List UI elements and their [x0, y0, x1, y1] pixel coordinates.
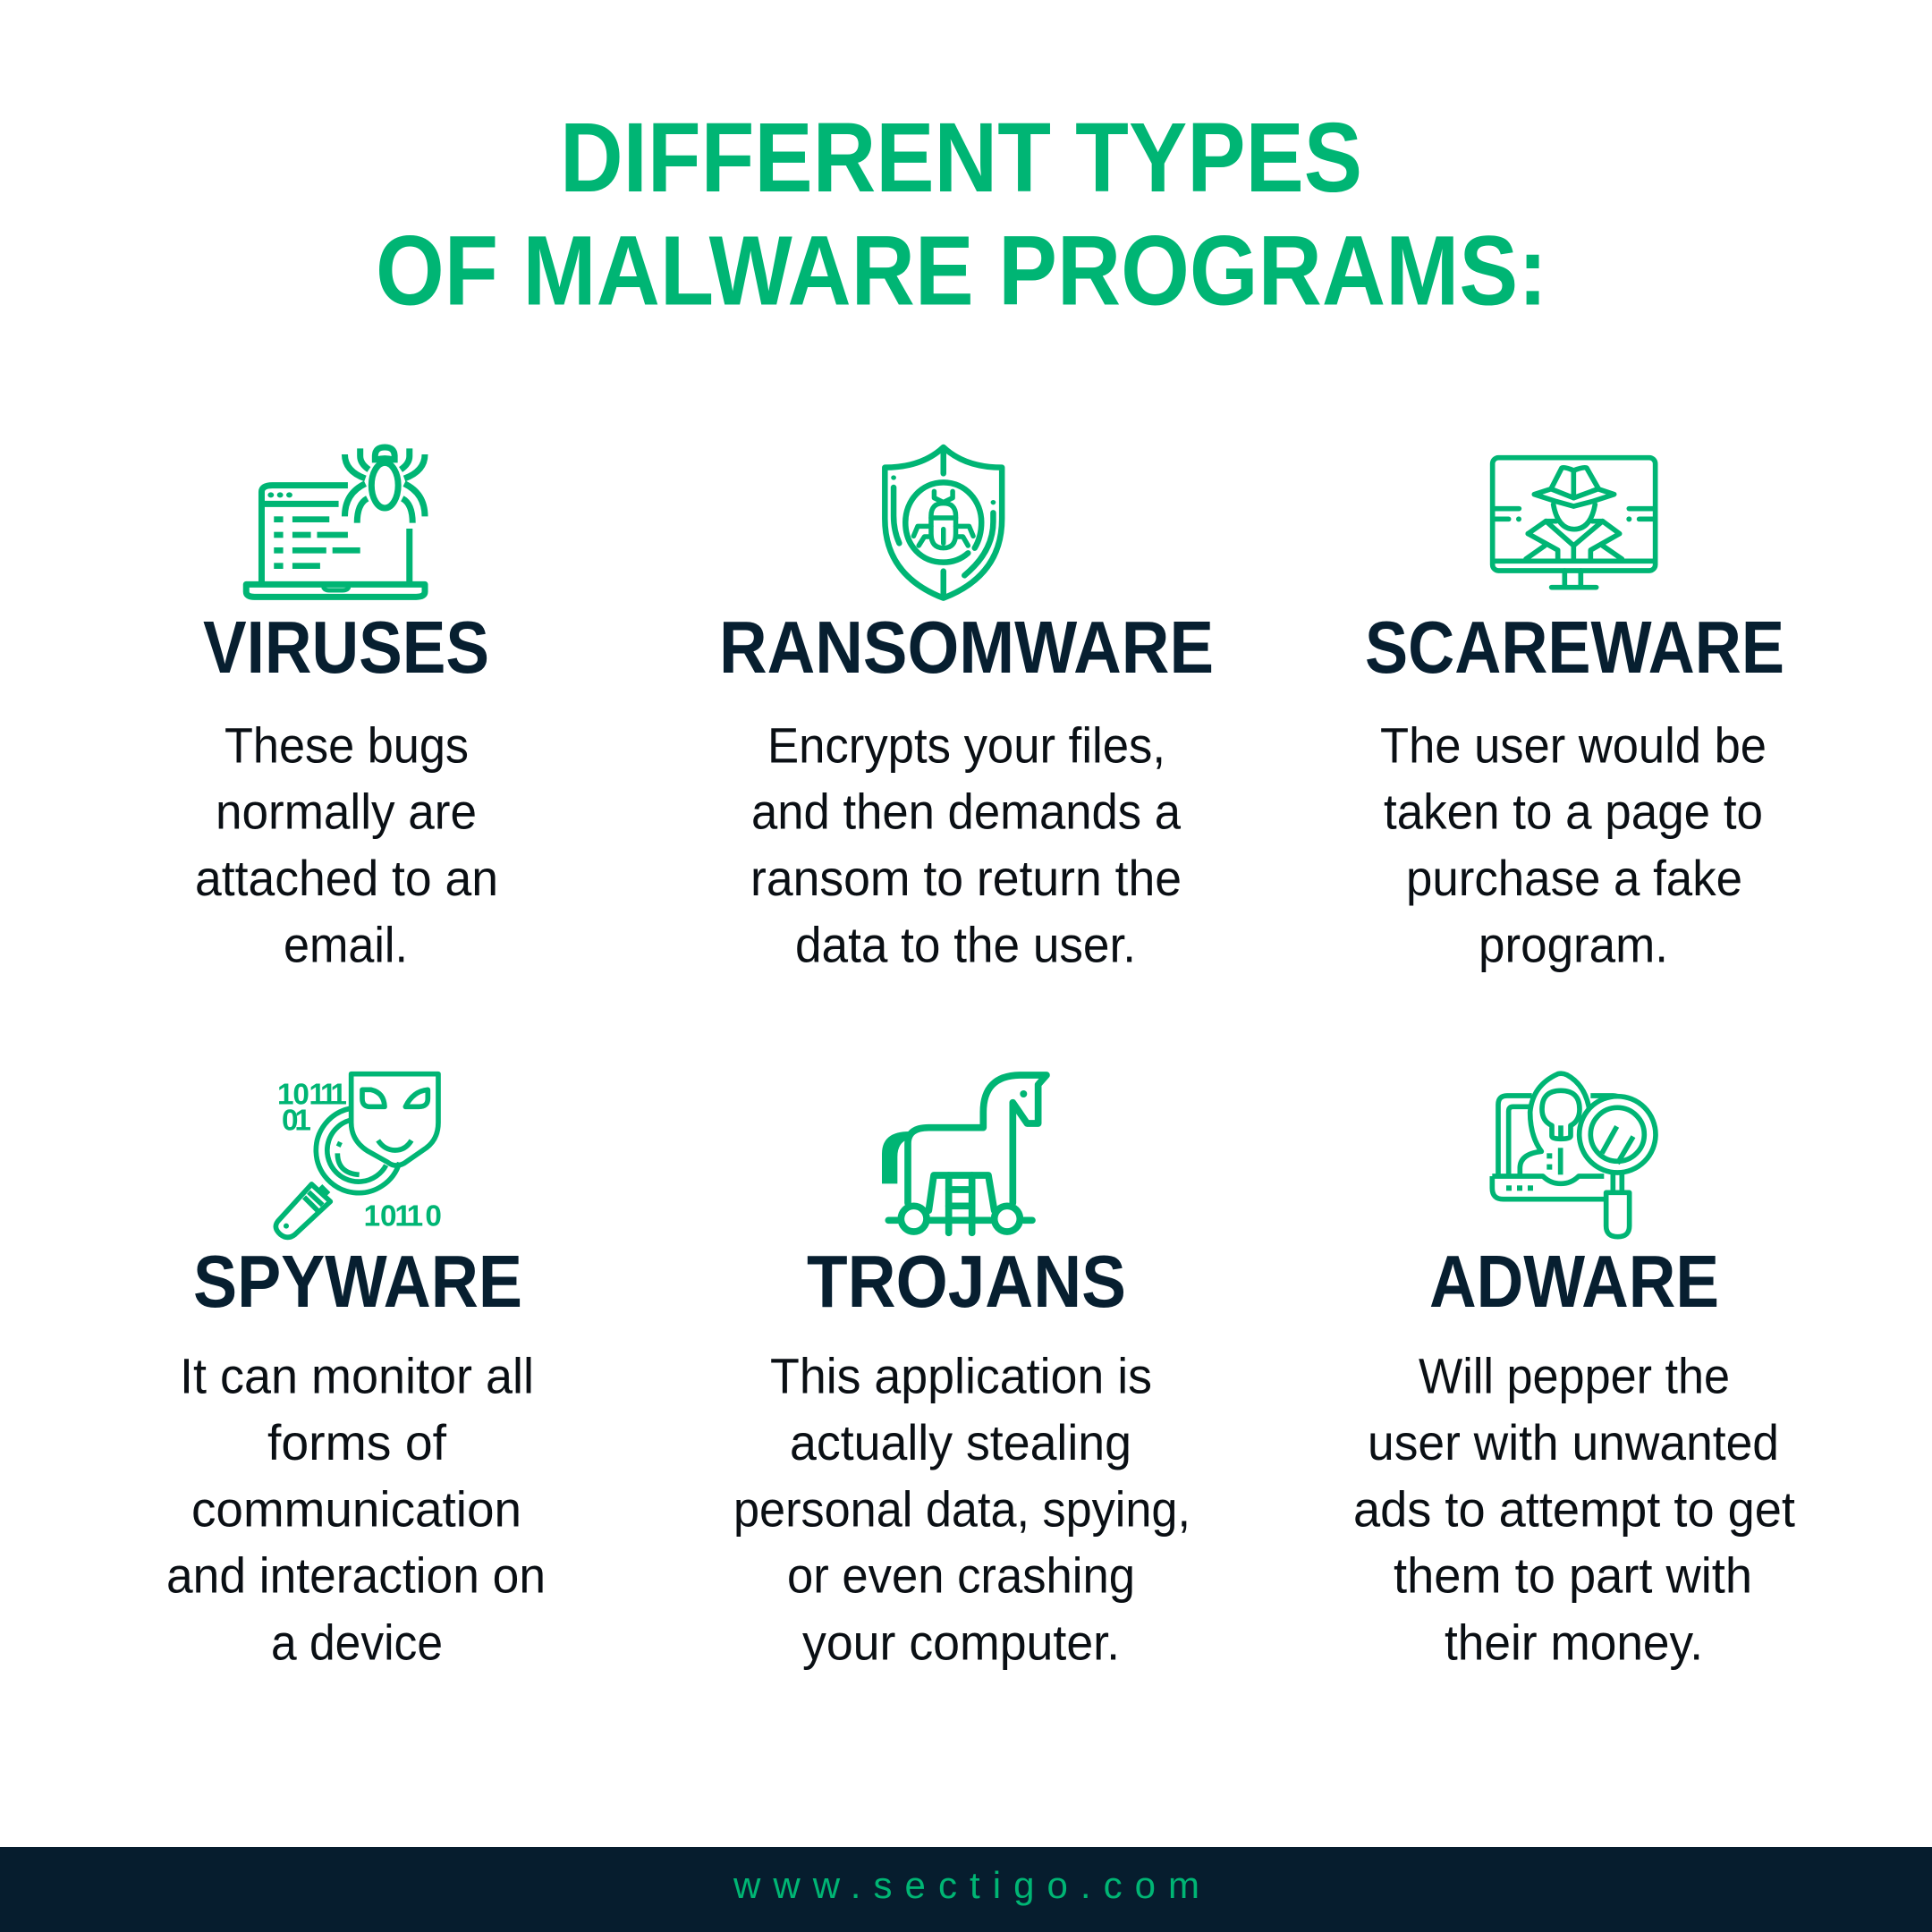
text: ransomware description: [750, 716, 1182, 972]
heading: viruses: VIRUSES: [203, 606, 489, 689]
text: spyware description: forms of: [267, 1414, 446, 1470]
heading: trojans: TROJANS: [807, 1240, 1126, 1323]
text: scareware description: The user would be: [1380, 716, 1767, 773]
icon: shield with bug: [885, 447, 1002, 598]
text: spyware description: a device: [271, 1614, 443, 1671]
heading: spyware: SPYWARE: [193, 1240, 522, 1323]
heading: adware: ADWARE: [1429, 1240, 1719, 1323]
text: adware description: ads to attempt to get: [1353, 1481, 1795, 1537]
icon: trojan horse: [882, 1075, 1046, 1233]
footer url: www.sectigo.com: [733, 1864, 1199, 1906]
title: OF MALWARE PROGRAMS:: [376, 216, 1547, 326]
text: spyware description: communication: [191, 1481, 521, 1537]
icon text: binary digits: 10111: [277, 1078, 347, 1111]
text: adware description: [1353, 1348, 1795, 1671]
panel: adware: [1353, 1073, 1795, 1671]
text: viruses description: attached to an: [195, 850, 498, 906]
text: viruses description: email.: [284, 916, 408, 972]
heading: ransomware: RANSOMWARE: [719, 606, 1214, 689]
text: spyware description: [166, 1348, 546, 1671]
text: trojans description: [733, 1348, 1191, 1671]
text: trojans description: personal data, spying,: [733, 1481, 1191, 1537]
text: adware description: them to part with: [1394, 1547, 1752, 1604]
text: ransomware description: and then demands a: [751, 784, 1182, 839]
text: spyware description: It can monitor all: [180, 1348, 534, 1404]
text: scareware description: [1380, 716, 1767, 972]
text: trojans description: your computer.: [802, 1614, 1120, 1671]
title: [376, 103, 1547, 326]
text: ransomware description: Encrypts your files,: [767, 716, 1165, 773]
text: trojans description: This application is: [770, 1348, 1152, 1404]
text: adware description: their money.: [1445, 1614, 1703, 1671]
icon: laptop with bulb and magnifier: [1492, 1073, 1656, 1237]
text: trojans description: actually stealing: [790, 1414, 1131, 1470]
icon text: binary digits: [277, 1078, 442, 1233]
text: viruses description: normally are: [216, 784, 477, 839]
panel: trojans: [733, 1075, 1191, 1671]
panel: scareware: [1365, 458, 1784, 972]
text: ransomware description: ransom to return the: [750, 850, 1182, 906]
text: scareware description: purchase a fake: [1406, 850, 1742, 906]
title: DIFFERENT TYPES: [560, 103, 1362, 213]
text: scareware description: taken to a page to: [1384, 784, 1763, 839]
panel: spyware: [166, 1074, 546, 1671]
icon text: binary digits: 01: [282, 1105, 311, 1138]
text: scareware description: program.: [1479, 916, 1668, 972]
icon: mask with magnifier: [275, 1074, 442, 1237]
text: spyware description: and interaction on: [166, 1547, 546, 1604]
footer bar: [0, 1847, 1932, 1932]
text: ransomware description: data to the user.: [795, 916, 1136, 972]
icon text: binary digits: 10110: [364, 1199, 442, 1233]
text: viruses description: [195, 716, 498, 972]
icon: monitor with spy: [1493, 458, 1656, 588]
text: trojans description: or even crashing: [787, 1547, 1135, 1604]
panel: viruses: [195, 447, 498, 972]
panel: ransomware: [719, 447, 1214, 972]
heading: scareware: SCAREWARE: [1365, 606, 1784, 689]
icon: laptop with bug: [246, 447, 425, 597]
text: viruses description: These bugs: [225, 716, 469, 773]
text: adware description: Will pepper the: [1419, 1348, 1730, 1404]
text: adware description: user with unwanted: [1368, 1414, 1779, 1470]
